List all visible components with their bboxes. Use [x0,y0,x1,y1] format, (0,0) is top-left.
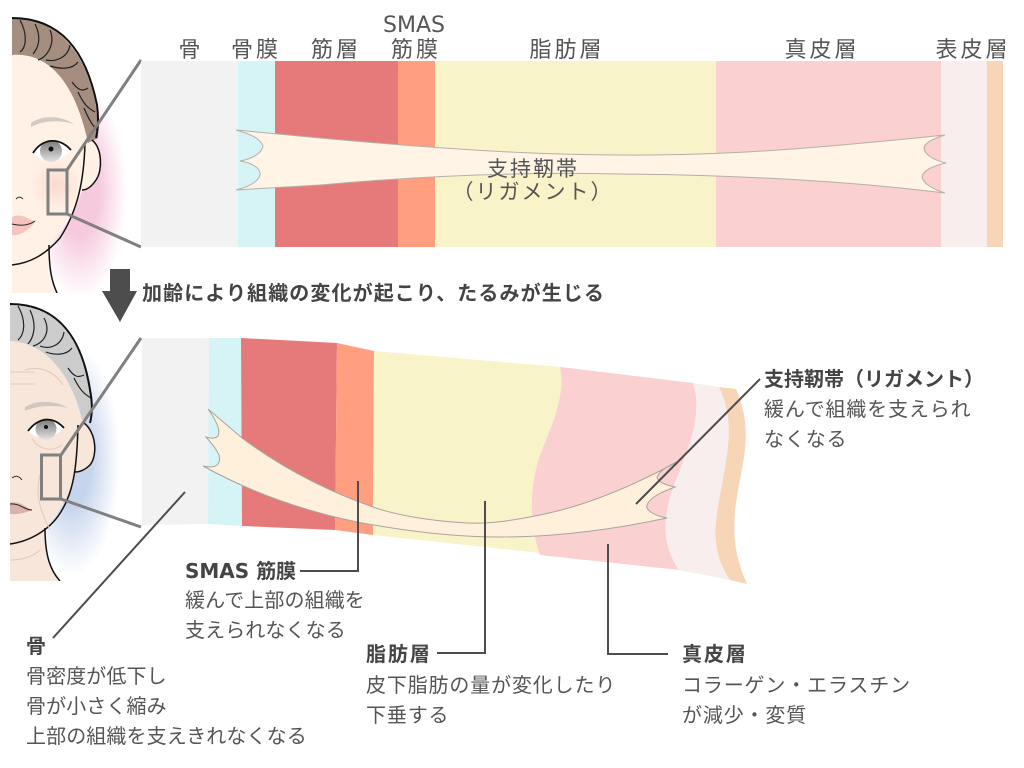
callout: ligament: なくなる [764,427,847,451]
layer labels: 表皮層 [935,38,1011,63]
illustration: young face [12,18,127,300]
layer labels [178,13,1011,63]
callout: bone [26,634,307,748]
ligament: healthy [236,130,946,193]
layer labels: 真皮層 [784,38,860,63]
layer labels: SMAS [383,13,445,38]
callout: SMAS fascia: SMAS 筋膜 [185,559,296,583]
layer labels: 筋層 [311,38,361,63]
callout: SMAS fascia [185,559,365,642]
ligament label: （リガメント） [452,180,614,204]
callout: bone: 骨が小さく縮み [26,694,167,718]
callout: ligament [764,367,984,451]
layer labels: 骨 [178,38,204,63]
layer labels: 骨膜 [231,38,281,63]
ligament label: 支持靭帯 [487,157,579,181]
callout: bone: 上部の組織を支えきれなくなる [26,724,307,748]
callout: SMAS fascia: 支えられなくなる [185,618,346,642]
callout: bone: 骨密度が低下し [26,664,167,688]
callout: SMAS fascia: 緩んで上部の組織を [185,588,365,612]
panel: healthy skin layers [141,61,1003,247]
callout: fat layer: 皮下脂肪の量が変化したり [366,673,616,697]
callout: bone: 骨 [26,634,48,658]
ligament: slackened [203,409,677,537]
callout: fat layer: 下垂する [366,703,449,727]
callout: ligament: 緩んで組織を支えられ [764,397,972,421]
illustration: aged face [10,304,120,581]
ligament label [452,157,614,204]
zoom marker: young face [48,60,141,247]
callout: fat layer [366,642,616,727]
leader lines [53,379,760,654]
layer labels: 脂肪層 [529,38,605,63]
zoom marker: aged face [42,338,141,527]
callout: dermis: コラーゲン・エラスチン [682,673,911,697]
callout: dermis: 真皮層 [682,642,748,666]
layer labels: 筋膜 [391,38,441,63]
heading: change with ageing: 加齢により組織の変化が起こり、たるみが生じる [142,281,605,305]
arrow: down [102,269,137,322]
callout: dermis: が減少・変質 [682,703,807,727]
callout: fat layer: 脂肪層 [366,642,432,666]
panel: aged skin layers [142,338,747,584]
callout: ligament: 支持靭帯（リガメント） [764,367,984,391]
callout: dermis [682,642,911,727]
